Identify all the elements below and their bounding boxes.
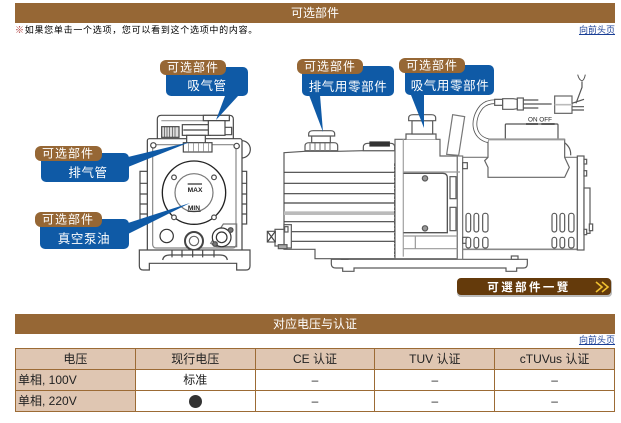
callout: vacuum pump oil: 真空泵油 [58,232,110,246]
table: voltage and certification: – [551,373,558,387]
table: voltage and certification: – [312,394,318,408]
heading: voltage and certification [15,314,615,334]
callout: vacuum pump oil [35,203,190,249]
table: voltage and certification: 电压 [63,352,87,366]
callout: exhaust parts: 可选部件 [304,58,356,74]
table: voltage and certification: 标准 [183,373,207,387]
callout: intake pipe [160,60,248,120]
link: back to top: 向前头页 [579,25,615,35]
table: voltage and certification: – [312,373,318,387]
callout: intake parts [399,58,494,128]
callout: vacuum pump oil: 可选部件 [42,212,94,226]
heading: voltage and certification: 对应电压与认证 [273,317,357,331]
button: optional parts list [457,278,612,297]
table: voltage and certification: 单相, 220V [18,394,77,408]
heading: optional parts [15,3,615,23]
front view pump [139,115,250,270]
table: voltage and certification [15,348,615,412]
callout: intake pipe: 吸气管 [187,78,227,93]
table: voltage and certification: 现行电压 [171,352,219,366]
table: voltage and certification: – [431,373,438,387]
button: optional parts list: 可選部件一覽 [487,280,571,294]
table: voltage and certification: CE 认证 [293,352,337,366]
side view pump: ON OFF [528,117,552,124]
table: voltage and certification: TUV 认证 [409,352,460,366]
callout: intake pipe: 可选部件 [167,60,219,74]
callout: exhaust pipe [35,142,190,182]
table: voltage and certification: – [551,394,558,408]
heading: optional parts: 可选部件 [291,6,339,20]
callout: intake parts: 可选部件 [406,58,458,72]
callout: exhaust pipe: 排气管 [68,165,108,180]
note text: ※如果您单击一个选项，您可以看到这个选项中的内容。 [15,25,258,35]
table: voltage and certification: 单相, 100V [18,373,77,387]
front view pump: MIN [188,205,200,212]
callout: exhaust parts: 排气用零部件 [309,79,387,94]
callout: intake parts: 吸气用零部件 [411,78,489,93]
front view pump: MAX [188,187,203,194]
callout: exhaust parts [297,58,394,132]
side view pump [267,75,593,271]
link: back to top: 向前头页 [579,335,615,345]
table: voltage and certification: – [431,394,438,408]
table: voltage and certification: cTUVus 认证 [520,352,589,366]
callout: exhaust pipe: 可选部件 [42,146,94,160]
